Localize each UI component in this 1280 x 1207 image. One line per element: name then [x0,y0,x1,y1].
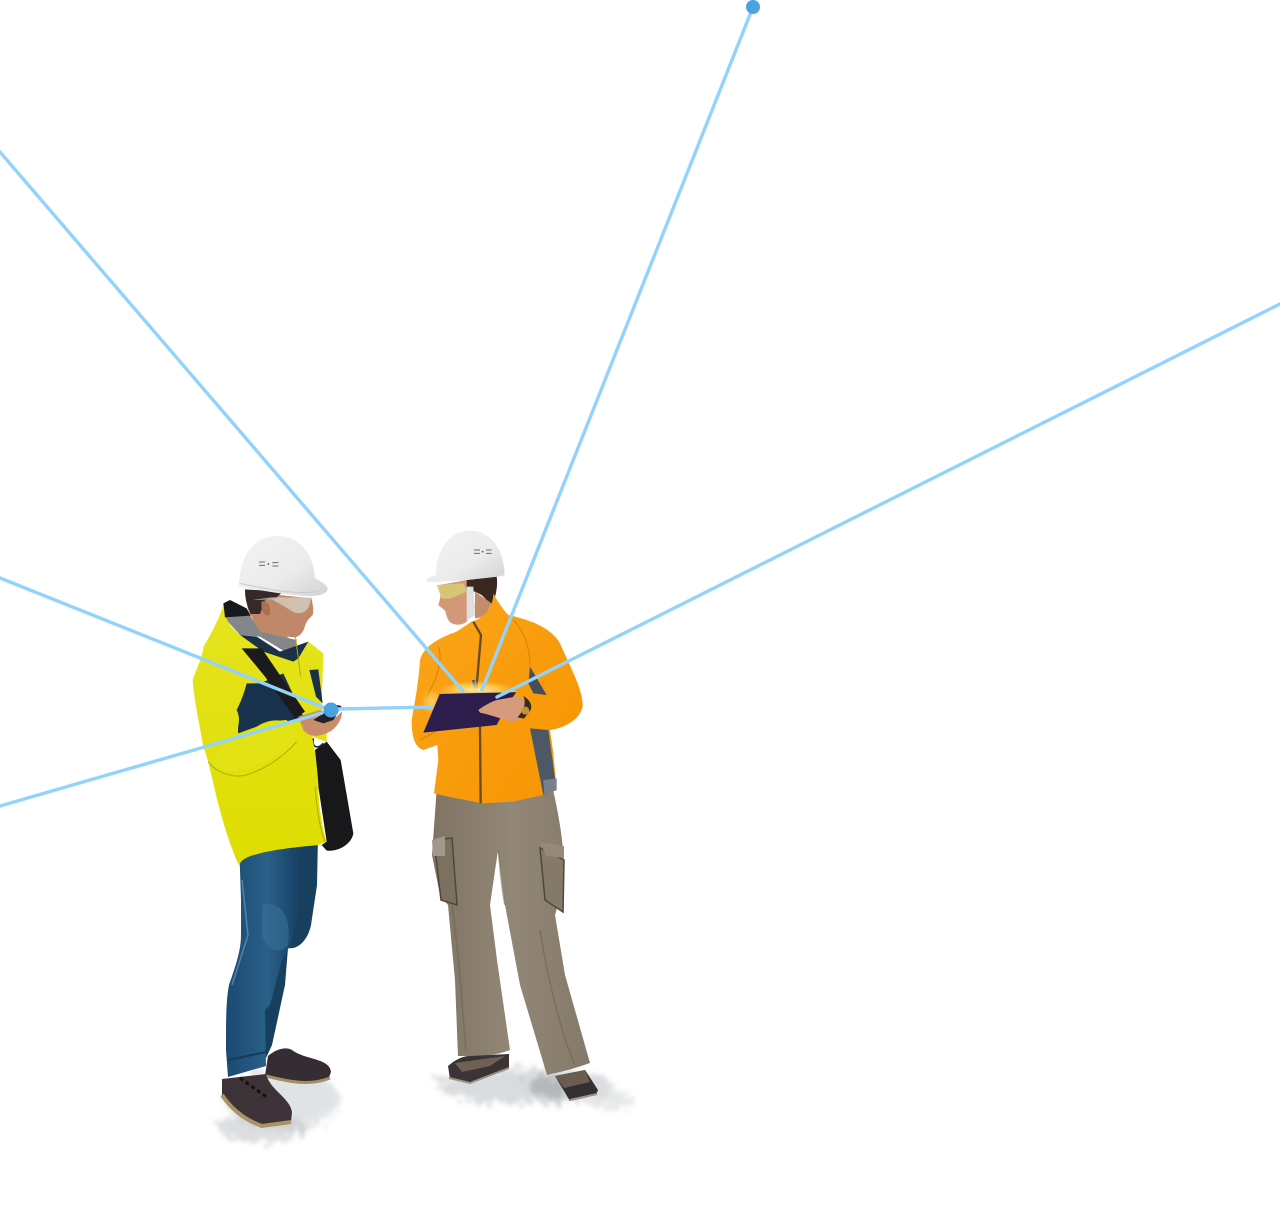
tablet with glow [420,681,517,733]
woman hand and watch [478,696,531,722]
man helmet [238,536,328,596]
line to top dot [482,7,753,690]
woman boots [448,1054,598,1101]
man bag [313,738,353,851]
node dot: handset [324,702,338,718]
figure: man in yellow jacket [193,536,353,1127]
line from handset to tablet [338,707,432,709]
line to right [497,304,1280,697]
ground shadow: woman [435,1068,636,1109]
woman trousers [432,785,590,1075]
connection lines [0,7,1280,806]
line to upper left [0,152,463,691]
man hand and handset [298,705,342,736]
line from left to handset [0,578,325,708]
line from lower left to handset [0,713,322,806]
man head [245,589,313,653]
woman head [437,577,497,625]
ground shadow: man [218,1070,340,1142]
figure: woman in orange jacket [412,531,598,1101]
woman helmet [427,531,505,582]
man jacket [193,600,327,866]
node dot: top [746,0,760,14]
man boots [222,1048,331,1127]
woman jacket [412,593,583,803]
man jeans [226,835,318,1077]
